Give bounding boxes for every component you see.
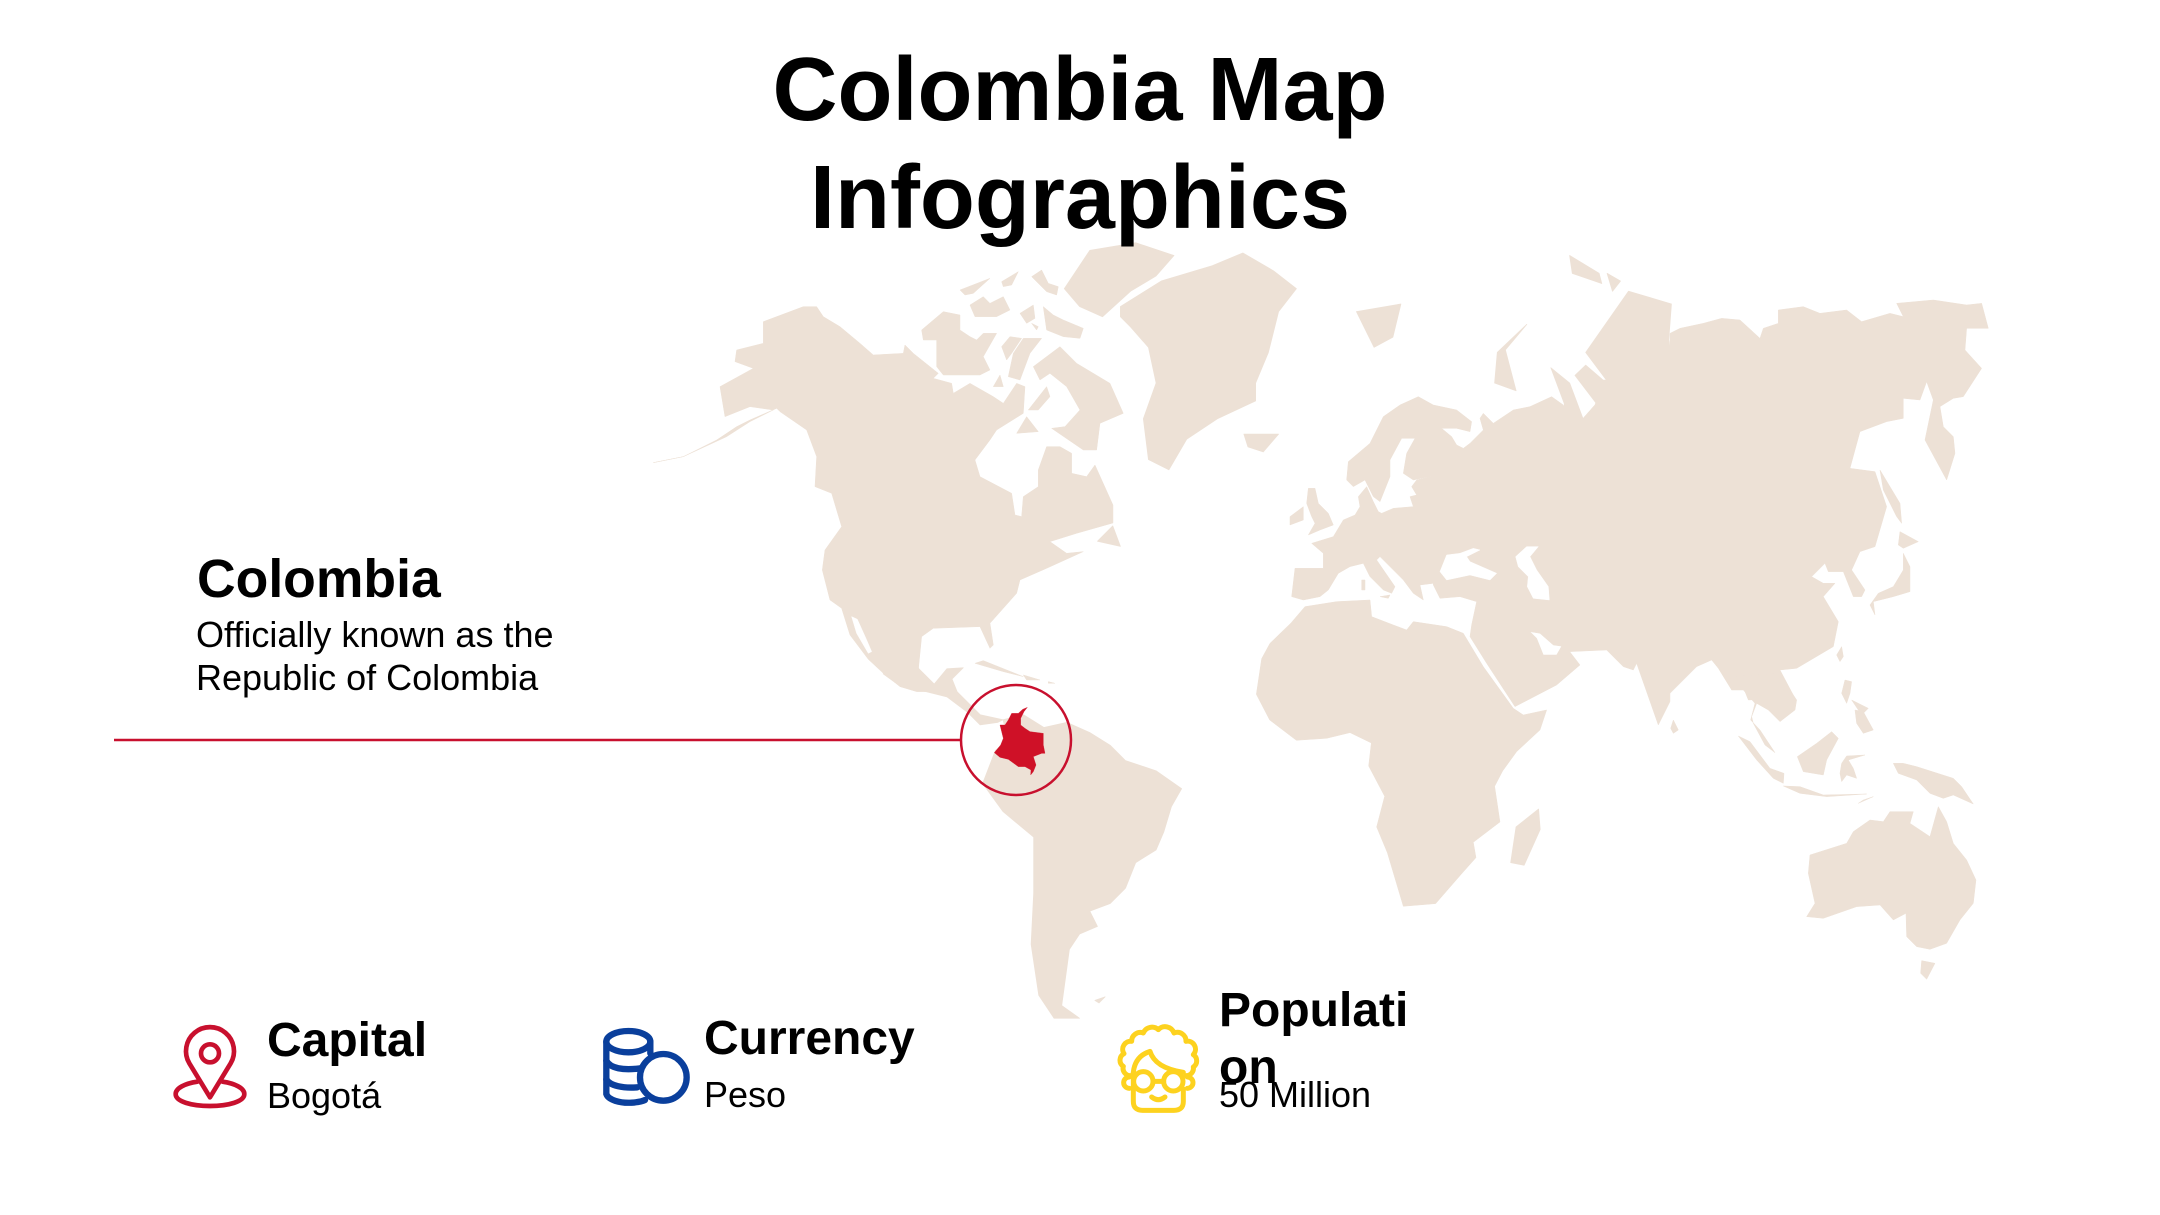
stat: Capital: Capital xyxy=(267,1014,427,1067)
icon: person with glasses xyxy=(1120,1027,1197,1110)
text block: Colombia: Republic of Colombia xyxy=(196,657,539,698)
icon: location pin xyxy=(176,1027,244,1106)
map: Southeast Asia and Oceania xyxy=(1671,673,1976,979)
title: Colombia Map xyxy=(772,40,1388,140)
stat: Capital: Bogotá xyxy=(267,1075,382,1116)
map: Europe, Western Asia xyxy=(1256,380,1670,906)
stat: Population: Populati xyxy=(1219,984,1408,1037)
stat: Capital xyxy=(267,1014,427,1116)
title xyxy=(772,40,1388,248)
stat: Currency: Peso xyxy=(704,1074,786,1115)
map: Central and South America, Greenland xyxy=(883,243,1296,1018)
stat: Currency: Currency xyxy=(704,1012,915,1065)
map: Siberia and Arctic islands xyxy=(1356,256,1682,865)
text block: Colombia: Officially known as the xyxy=(196,614,554,655)
icon: coins xyxy=(606,1031,687,1103)
stat: Population xyxy=(1219,984,1408,1115)
map: East Asia xyxy=(1670,300,1988,700)
world map xyxy=(653,243,1988,1018)
stat: Population: on xyxy=(1219,1041,1278,1094)
callout line to Colombia xyxy=(114,739,961,741)
highlight circle around Colombia xyxy=(961,685,1071,795)
stat: Population: 50 Million xyxy=(1219,1074,1371,1115)
map: North America xyxy=(653,270,1123,692)
stat: Currency xyxy=(704,1012,915,1115)
text block: Colombia xyxy=(196,550,554,698)
title: Infographics xyxy=(810,148,1350,248)
Colombia shape xyxy=(994,707,1045,775)
text block: Colombia: Colombia xyxy=(197,550,442,609)
